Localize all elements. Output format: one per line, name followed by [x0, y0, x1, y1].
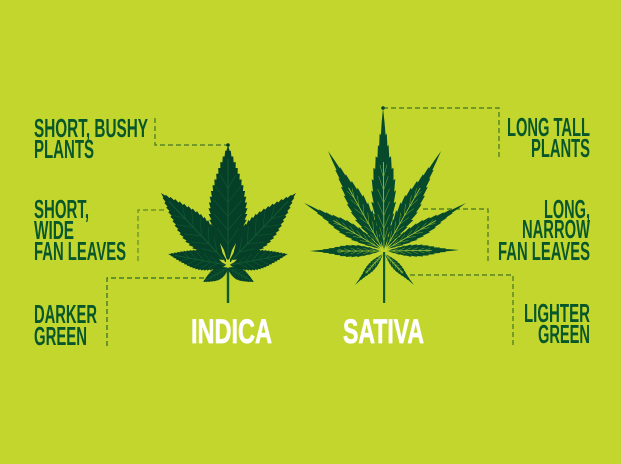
icon: sativa leaf [300, 106, 470, 303]
leader line: long tall plants [383, 108, 499, 158]
label: darker green [34, 299, 97, 351]
icon: indica leaf [150, 143, 307, 303]
heading: indica: INDICA [191, 313, 272, 351]
label: long tall plants [507, 112, 590, 163]
label: short, wide fan leaves: SHORT, [34, 194, 89, 224]
label: short, wide fan leaves [34, 194, 126, 266]
label: short, bushy plants: PLANTS [34, 134, 94, 164]
leader line: short, wide fan leaves [138, 210, 167, 261]
label: short, wide fan leaves: FAN LEAVES [34, 236, 126, 266]
leader line: short, bushy plants [155, 118, 228, 145]
label: short, bushy plants [34, 113, 148, 164]
heading: sativa: SATIVA [343, 313, 424, 351]
leader line: long, narrow fan leaves [423, 209, 488, 262]
label: lighter green [524, 298, 590, 349]
label: short, bushy plants: SHORT, BUSHY [34, 113, 148, 143]
leader line: lighter green [410, 275, 513, 345]
label: long, narrow fan leaves [498, 194, 590, 266]
label: darker green: DARKER [34, 299, 97, 329]
leader line: darker green [107, 278, 204, 346]
label: darker green: GREEN [34, 321, 87, 351]
label: short, wide fan leaves: WIDE [34, 215, 74, 245]
